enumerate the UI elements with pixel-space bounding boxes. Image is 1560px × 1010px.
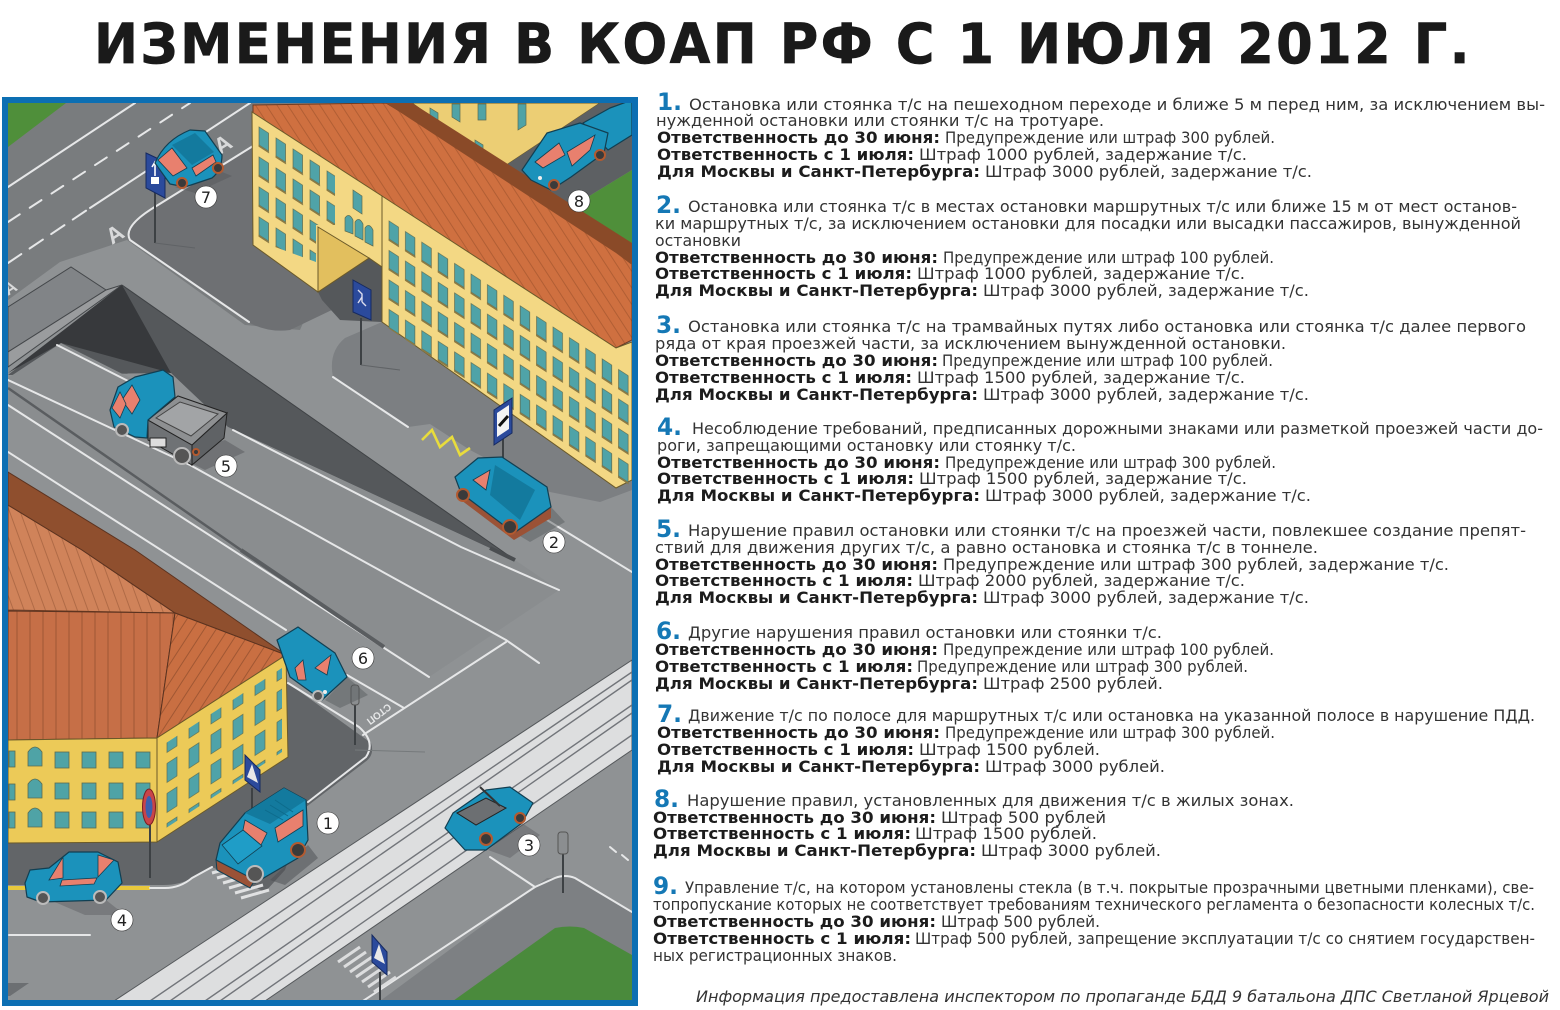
sign: pedestrian zone <box>353 280 400 370</box>
source note: Информация предоставлена инспектором по пропаганде БДД 9 батальона ДПС Светланой Ярцевой <box>696 987 1549 1006</box>
vehicle 3: cabriolet <box>445 787 540 858</box>
item 4: роги, запрещающими остановку или стоянку т/с. <box>657 436 1076 455</box>
item 4: Предупреждение или штраф 300 рублей. <box>945 453 1276 472</box>
item 2: Ответственность до 30 июня: <box>655 248 938 267</box>
marker 2 <box>543 531 565 553</box>
yellow zigzag marking <box>422 430 470 455</box>
item 7 <box>657 700 1535 776</box>
item 9: Ответственность до 30 июня: <box>653 912 936 931</box>
curbs lower building <box>288 683 370 802</box>
item 3: Для Москвы и Санкт-Петербурга: <box>655 385 978 404</box>
item 7: Ответственность с 1 июля: <box>657 740 914 759</box>
sidewalk right wing <box>332 322 632 502</box>
item 7: Для Москвы и Санкт-Петербурга: <box>657 757 980 776</box>
marker 3: 3 <box>524 836 534 855</box>
item 2: ки маршрутных т/с, за исключением остановки для посадки или высадки пассажиров, вынужденной <box>655 214 1521 233</box>
road markings upper road: А <box>0 277 21 299</box>
item 1: Предупреждение или штраф 300 рублей. <box>945 128 1275 147</box>
item 7: Предупреждение или штраф 300 рублей. <box>945 723 1275 742</box>
item 3: 3. <box>656 311 681 339</box>
item 8: 8. <box>654 785 679 813</box>
item 8: Штраф 500 рублей <box>941 808 1106 827</box>
item 4: Штраф 1500 рублей, задержание т/с. <box>919 469 1247 488</box>
item 4: Ответственность с 1 июля: <box>657 469 914 488</box>
vehicle 2: van <box>455 457 565 542</box>
item 6: Штраф 2500 рублей. <box>983 674 1163 693</box>
item 3: Штраф 3000 рублей, задержание т/с. <box>983 385 1309 404</box>
item 5: Штраф 3000 рублей, задержание т/с. <box>983 588 1309 607</box>
crosswalk lower <box>338 947 396 992</box>
item 3: Штраф 1500 рублей, задержание т/с. <box>917 368 1245 387</box>
traffic light 3 <box>558 832 568 893</box>
item 1: Ответственность до 30 июня: <box>657 128 940 147</box>
item 5: Ответственность до 30 июня: <box>655 555 938 574</box>
item 9 <box>653 872 1535 965</box>
marker 4: 4 <box>117 911 127 930</box>
item 4 <box>657 413 1543 505</box>
sign: bus lane <box>146 153 195 248</box>
lower right grass <box>453 926 632 1001</box>
item 5: Нарушение правил остановки или стоянки т/с на проезжей части, повлекшее создание препят- <box>688 521 1526 540</box>
item 3 <box>655 311 1526 404</box>
item 6: 6. <box>656 617 681 645</box>
item 4: Несоблюдение требований, предписанных дорожными знаками или разметкой проезжей части до- <box>692 419 1543 438</box>
item 5: Штраф 2000 рублей, задержание т/с. <box>918 571 1245 590</box>
item 2 <box>655 191 1521 300</box>
marker 2: 2 <box>549 533 559 552</box>
item 1 <box>656 88 1545 181</box>
item 2: Для Москвы и Санкт-Петербурга: <box>655 281 978 300</box>
main building roof <box>253 103 632 348</box>
item 8: Ответственность до 30 июня: <box>653 808 936 827</box>
item 3: Предупреждение или штраф 100 рублей. <box>942 351 1273 370</box>
item 6: Предупреждение или штраф 100 рублей. <box>943 640 1274 659</box>
item 8 <box>653 785 1294 860</box>
marker 5 <box>215 455 237 477</box>
item 6: Ответственность с 1 июля: <box>655 657 913 676</box>
sign: bottom crossing <box>372 935 387 1001</box>
arched windows <box>345 190 373 246</box>
item 1: Штраф 3000 рублей, задержание т/с. <box>985 162 1312 181</box>
item 3: ряда от края проезжей части, за исключением вынужденной остановки. <box>655 334 1286 353</box>
tunnel roof slab <box>8 267 106 352</box>
item 5: Ответственность с 1 июля: <box>655 571 913 590</box>
sidewalk upper <box>130 148 331 331</box>
item 3: Остановка или стоянка т/с на трамвайных путях либо остановка или стоянка т/с далее первого <box>688 317 1526 336</box>
item 7: Штраф 3000 рублей. <box>985 757 1165 776</box>
marker 8 <box>568 190 590 212</box>
vehicle 4: sedan <box>25 852 125 915</box>
item 1: Для Москвы и Санкт-Петербурга: <box>657 162 980 181</box>
marker 7 <box>195 186 217 208</box>
item 7: Движение т/с по полосе для маршрутных т/с или остановка на указанной полосе в нарушение ПДД. <box>688 706 1535 725</box>
parking stall markings <box>347 642 506 735</box>
back building <box>412 103 600 168</box>
vehicle 5: truck <box>110 370 245 470</box>
item 7: 7. <box>657 700 682 728</box>
marker 6: 6 <box>358 649 368 668</box>
item 2: Остановка или стоянка т/с в местах остановки маршрутных т/с или ближе 15 м от мест останов- <box>688 197 1517 216</box>
item 5: ствий для движения других т/с, а равно остановка и стоянка т/с в тоннеле. <box>655 538 1318 557</box>
sign: pedestrian crossing corner <box>245 755 260 812</box>
item 2: 2. <box>656 191 681 219</box>
item 1: нужденной остановки или стоянки т/с на тротуаре. <box>656 111 1104 130</box>
panel: street illustration <box>0 100 635 1003</box>
vehicle 8 <box>522 100 632 190</box>
lower building roof <box>8 505 175 613</box>
item 1: 1. <box>657 88 682 116</box>
item 7: Штраф 1500 рублей. <box>919 740 1100 759</box>
item 9: Ответственность с 1 июля: <box>653 929 911 948</box>
item 5: Предупреждение или штраф 300 рублей, задержание т/с. <box>943 555 1449 574</box>
rails <box>150 672 632 1001</box>
tunnel dark wall <box>8 285 515 560</box>
item 6: Другие нарушения правил остановки или стоянки т/с. <box>688 623 1162 642</box>
item 5 <box>655 515 1526 607</box>
item 8: Штраф 1500 рублей. <box>915 824 1097 843</box>
marker 7: 7 <box>201 188 211 207</box>
item 4: Ответственность до 30 июня: <box>657 453 940 472</box>
vehicle 6 <box>277 627 368 708</box>
lower building facade <box>8 738 157 843</box>
main building right wing <box>382 196 632 488</box>
item 2: Штраф 1000 рублей, задержание т/с. <box>917 264 1245 283</box>
road markings upper road: А <box>209 129 237 159</box>
upper road surface <box>8 103 340 330</box>
vehicle 7 <box>155 130 232 193</box>
item 4: Штраф 3000 рублей, задержание т/с. <box>985 486 1311 505</box>
item 8: Ответственность с 1 июля: <box>653 824 911 843</box>
marker 1: 1 <box>323 814 333 833</box>
tram band <box>114 660 632 1001</box>
marker 4 <box>111 909 133 931</box>
item 4: 4. <box>657 413 682 441</box>
marker 5: 5 <box>221 457 231 476</box>
item 1: Штраф 1000 рублей, задержание т/с. <box>919 145 1247 164</box>
lower building sidewalk <box>8 683 372 892</box>
grass top left <box>8 103 66 147</box>
item 8: Для Москвы и Санкт-Петербурга: <box>653 841 976 860</box>
item 5: 5. <box>656 515 681 543</box>
sign: no stopping <box>142 789 156 878</box>
marker 6 <box>352 647 374 669</box>
parking stall markings: СТОП <box>364 701 393 726</box>
item 1: Остановка или стоянка т/с на пешеходном переходе и ближе 5 м перед ним, за исключением вы- <box>689 95 1545 114</box>
item 4: Для Москвы и Санкт-Петербурга: <box>657 486 980 505</box>
sign: bus stop <box>494 398 512 460</box>
marker 1 <box>317 812 339 834</box>
item 6 <box>655 617 1274 693</box>
ramp markings <box>8 345 632 677</box>
item 2: Ответственность с 1 июля: <box>655 264 912 283</box>
main building left wing <box>252 112 382 292</box>
item 2: Предупреждение или штраф 100 рублей. <box>943 248 1274 267</box>
road markings upper road <box>0 103 250 299</box>
item 9: ных регистрационных знаков. <box>653 946 897 965</box>
item 2: остановки <box>655 231 741 250</box>
item 3: Ответственность с 1 июля: <box>655 368 912 387</box>
marker 8: 8 <box>574 192 584 211</box>
item 5: Для Москвы и Санкт-Петербурга: <box>655 588 978 607</box>
crosswalk upper <box>212 865 269 898</box>
lower right sidewalk <box>380 877 632 1001</box>
item 9: Штраф 500 рублей. <box>941 912 1100 931</box>
item 6: Ответственность до 30 июня: <box>655 640 938 659</box>
title: ИЗМЕНЕНИЯ В КОАП РФ С 1 ИЮЛЯ 2012 Г. <box>94 12 1472 76</box>
item 6: Предупреждение или штраф 300 рублей. <box>917 657 1248 676</box>
panel border <box>5 100 635 1003</box>
tunnel mouth <box>8 285 171 373</box>
traffic light 6 <box>351 685 425 752</box>
item 9: 9. <box>653 872 678 900</box>
arch <box>318 227 369 292</box>
item 9: Штраф 500 рублей, запрещение эксплуатации т/с со снятием государствен- <box>915 929 1535 948</box>
ramp lane <box>12 343 490 548</box>
arch shadow <box>318 258 382 322</box>
item 8: Нарушение правил, установленных для движения т/с в жилых зонах. <box>687 791 1294 810</box>
item 7: Ответственность до 30 июня: <box>657 723 940 742</box>
item 2: Штраф 3000 рублей, задержание т/с. <box>983 281 1309 300</box>
vehicle 1: jeep <box>216 788 318 888</box>
item 3: Ответственность до 30 июня: <box>655 351 938 370</box>
item 1: Ответственность с 1 июля: <box>657 145 914 164</box>
item 6: Для Москвы и Санкт-Петербурга: <box>655 674 978 693</box>
item 8: Штраф 3000 рублей. <box>981 841 1161 860</box>
marker 3 <box>518 834 540 856</box>
road markings upper road: А <box>101 219 129 249</box>
